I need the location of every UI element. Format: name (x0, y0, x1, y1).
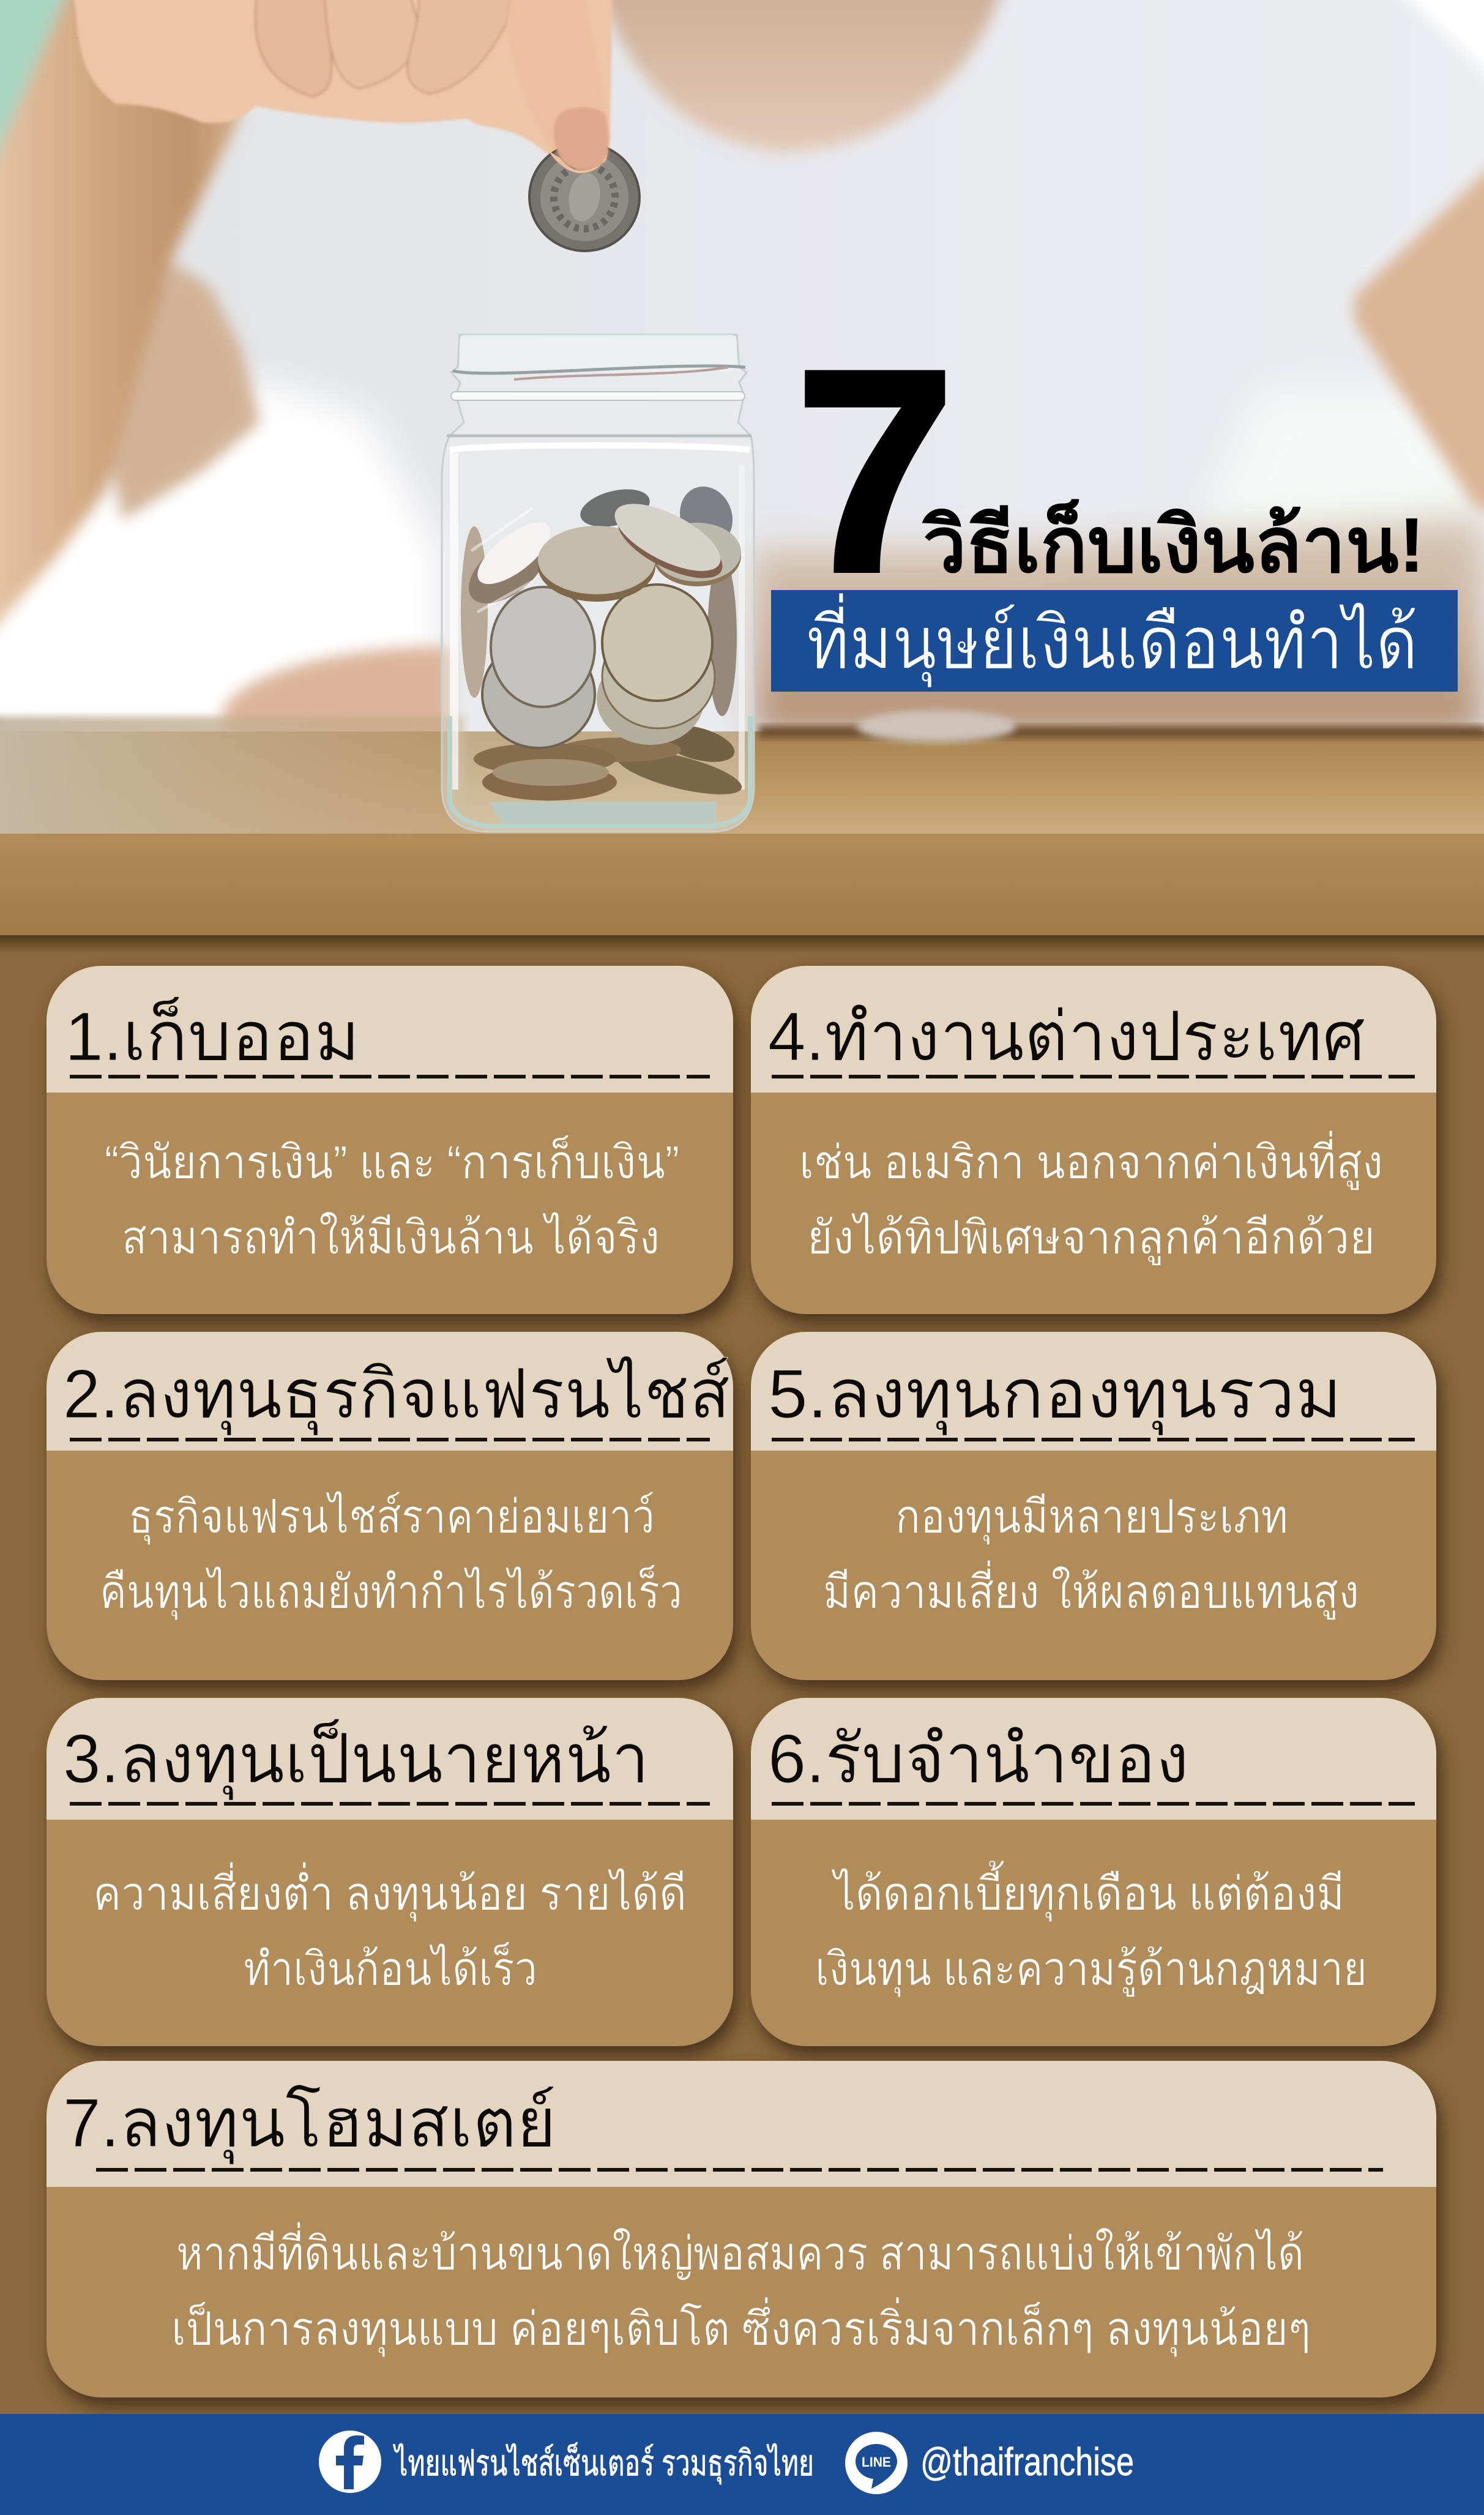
coin (528, 147, 641, 252)
panel 6 (751, 1698, 1436, 2046)
subtitle banner: ที่มนุษย์เงินเดือนทำได้ (807, 592, 1418, 688)
hand (73, 0, 612, 171)
icon: line (845, 2432, 908, 2494)
panel 3: ทำเงินก้อนได้เร็ว (244, 1941, 537, 1995)
panel 2: ธุรกิจแฟรนไชส์ราคาย่อมเยาว์ (129, 1490, 655, 1545)
jar coins (457, 479, 745, 823)
panel 3 (47, 1698, 733, 2046)
panel 3: 3.ลงทุนเป็นนายหน้า (63, 1719, 649, 1801)
footer page name: ไทยแฟรนไชส์เซ็นเตอร์ รวมธุรกิจไทย (393, 2442, 814, 2485)
panel 2: คืนทุนไวแถมยังทำกำไรได้รวดเร็ว (100, 1564, 682, 1620)
panel 5: 5.ลงทุนกองทุนรวม (768, 1356, 1342, 1436)
footer bar (0, 2414, 1484, 2515)
panel 1: สามารถทำให้มีเงินล้าน ได้จริง (122, 1211, 660, 1264)
icon: facebook (319, 2431, 381, 2493)
panel 7: เป็นการลงทุนแบบ ค่อยๆเติบโต ซึ่งควรเริ่มจากเล็กๆ ลงทุนน้อยๆ (171, 2297, 1311, 2357)
panel 2: 2.ลงทุนธุรกิจแฟรนไชส์ (63, 1356, 730, 1436)
title (771, 310, 1458, 692)
panel 7 (47, 2061, 1436, 2397)
panel 4: เช่น อเมริกา นอกจากค่าเงินที่สูง (799, 1130, 1383, 1190)
panel 1: “วินัยการเงิน” และ “การเก็บเงิน” (105, 1135, 679, 1189)
panel 6: 6.รับจำนำของ (768, 1721, 1189, 1797)
big number 7: 7 (795, 310, 955, 632)
panel 5 (751, 1332, 1436, 1680)
panel 1 (47, 966, 733, 1314)
title line: วิธีเก็บเงินล้าน! (922, 499, 1425, 588)
panel 1: 1.เก็บออม (65, 996, 360, 1075)
band shadow (0, 935, 1484, 954)
panel 3: ความเสี่ยงต่ำ ลงทุนน้อย รายได้ดี (93, 1862, 687, 1922)
panel 4: ยังได้ทิปพิเศษจากลูกค้าอีกด้วย (807, 1211, 1375, 1266)
panel 6: ได้ดอกเบี้ยทุกเดือน แต่ต้องมี (831, 1860, 1344, 1922)
panel 4 (751, 966, 1436, 1314)
wooden band under the photo (0, 834, 1484, 935)
panel 2 (47, 1332, 733, 1680)
jar (442, 335, 754, 832)
panel 7: 7.ลงทุนโฮมสเตย์ (63, 2085, 556, 2165)
panel 5: กองทุนมีหลายประเภท (895, 1491, 1288, 1545)
panel 4: 4.ทำงานต่างประเทศ (768, 998, 1365, 1075)
icon: line: LINE (862, 2454, 891, 2470)
footer line account: @thaifranchise (920, 2440, 1134, 2484)
panel 6: เงินทุน และความรู้ด้านกฎหมาย (815, 1943, 1367, 1997)
panel 5: มีความเสี่ยง ให้ผลตอบแทนสูง (823, 1560, 1359, 1620)
panel 7: หากมีที่ดินและบ้านขนาดใหญ่พอสมควร สามารถแบ่งให้เข้าพักได้ (176, 2222, 1304, 2280)
photo: hand dropping a coin into a glass jar (0, 0, 1484, 851)
table surface (0, 731, 1484, 835)
